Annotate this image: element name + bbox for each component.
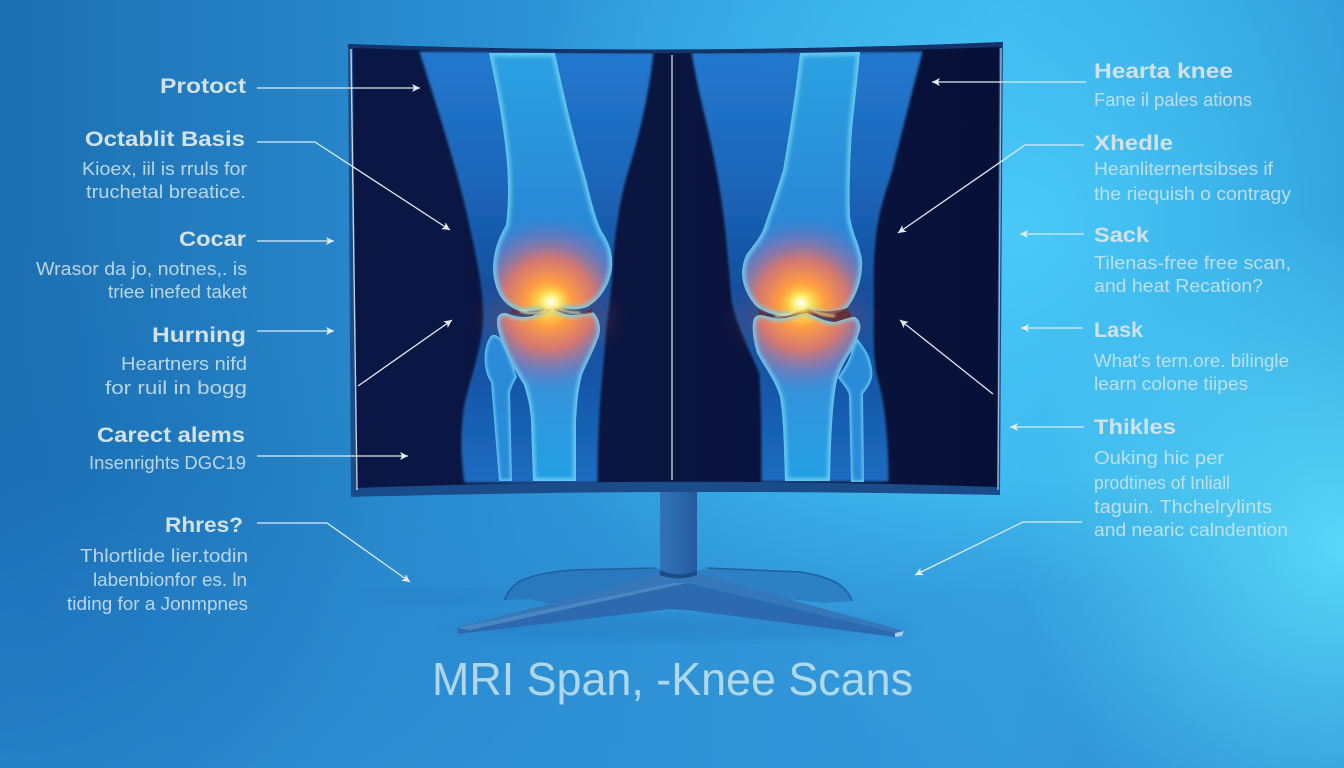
label: Rhres?: labenbionfor es. ln: [93, 570, 247, 590]
label: Hurning: [105, 324, 247, 398]
label: Rhres?: Rhres?: [165, 514, 243, 537]
joint space left: [510, 308, 592, 316]
joint space right: [757, 306, 852, 322]
stand front legs: [457, 570, 904, 637]
tibia left: [497, 310, 600, 481]
label: Lask: What's tern.ore. bilingle: [1094, 351, 1289, 371]
label: Sack: and heat Recation?: [1094, 276, 1263, 296]
label: Hearta knee: Hearta knee: [1094, 60, 1233, 83]
screen dividers: [351, 48, 1001, 490]
label: Xhedle: Heanliternertsibses if: [1094, 159, 1274, 179]
label: Hearta knee: Fane il pales ations: [1094, 90, 1252, 110]
label: Hurning: Heartners nifd: [121, 354, 247, 374]
soft tissue left: [420, 52, 653, 482]
femur right: [738, 50, 868, 320]
label: Octablit Basis: Kioex, iil is rruls for: [82, 159, 247, 179]
label: Rhres?: tiding for a Jonmpnes: [67, 594, 248, 614]
monitor stand: [360, 490, 910, 637]
arrows: [257, 82, 1086, 582]
monitor: [348, 42, 1003, 497]
label: Lask: learn colone tiipes: [1094, 374, 1248, 394]
label: Carect alems: Insenrights DGC19: [89, 453, 246, 473]
label: Octablit Basis: truchetal breatice.: [86, 182, 246, 202]
monitor frame: [348, 42, 1003, 497]
fibula right: [838, 338, 872, 482]
label: Sack: [1094, 224, 1291, 296]
label: Rhres?: Thlortlide lier.todin: [80, 546, 248, 566]
label: Hurning: Hurning: [152, 324, 246, 347]
label: Cocar: [36, 228, 247, 302]
label: Hearta knee: [1094, 60, 1252, 110]
left knee scan: [420, 50, 653, 485]
right labels: [1094, 60, 1291, 540]
label: Cocar: Wrasor da jo, notnes,. is: [36, 259, 247, 279]
label: Thikles: Thikles: [1094, 416, 1176, 439]
label: Lask: Lask: [1094, 319, 1143, 342]
femur left: [485, 50, 615, 315]
label: Hurning: for ruil in bogg: [105, 378, 247, 398]
label: Lask: [1094, 319, 1289, 394]
label: Carect alems: Carect alems: [97, 424, 245, 447]
label: Protoct: Protoct: [160, 75, 246, 98]
label: Xhedle: Xhedle: [1094, 132, 1173, 155]
label: Octablit Basis: Octablit Basis: [85, 128, 245, 151]
stand back feet: [505, 568, 852, 612]
label: Cocar: Cocar: [179, 228, 246, 251]
label: Thikles: Ouking hic per: [1094, 448, 1224, 468]
soft tissue right: [692, 52, 922, 481]
screen: [353, 47, 999, 488]
label: Cocar: triee inefed taket: [108, 282, 247, 302]
fibula left: [484, 334, 517, 481]
label: Thikles: prodtines of Inliall: [1094, 473, 1230, 493]
label: Xhedle: the riequish o contragy: [1094, 184, 1291, 204]
stand neck: [660, 490, 697, 574]
label: Sack: Sack: [1094, 224, 1149, 247]
label: Thikles: [1094, 416, 1288, 540]
left labels: [36, 75, 248, 614]
label: Octablit Basis: [82, 128, 247, 202]
label: Rhres?: [67, 514, 248, 614]
label: Thikles: and nearic calndention: [1094, 520, 1288, 540]
right knee scan: [692, 50, 922, 485]
label: Sack: Tilenas-free free scan,: [1094, 253, 1291, 273]
label: Thikles: taguin. Thchelrylints: [1094, 497, 1272, 517]
label: Xhedle: [1094, 132, 1291, 204]
tibia right: [752, 313, 860, 481]
title: MRI Span, -Knee Scans: [432, 653, 913, 705]
label: Carect alems: [89, 424, 246, 473]
